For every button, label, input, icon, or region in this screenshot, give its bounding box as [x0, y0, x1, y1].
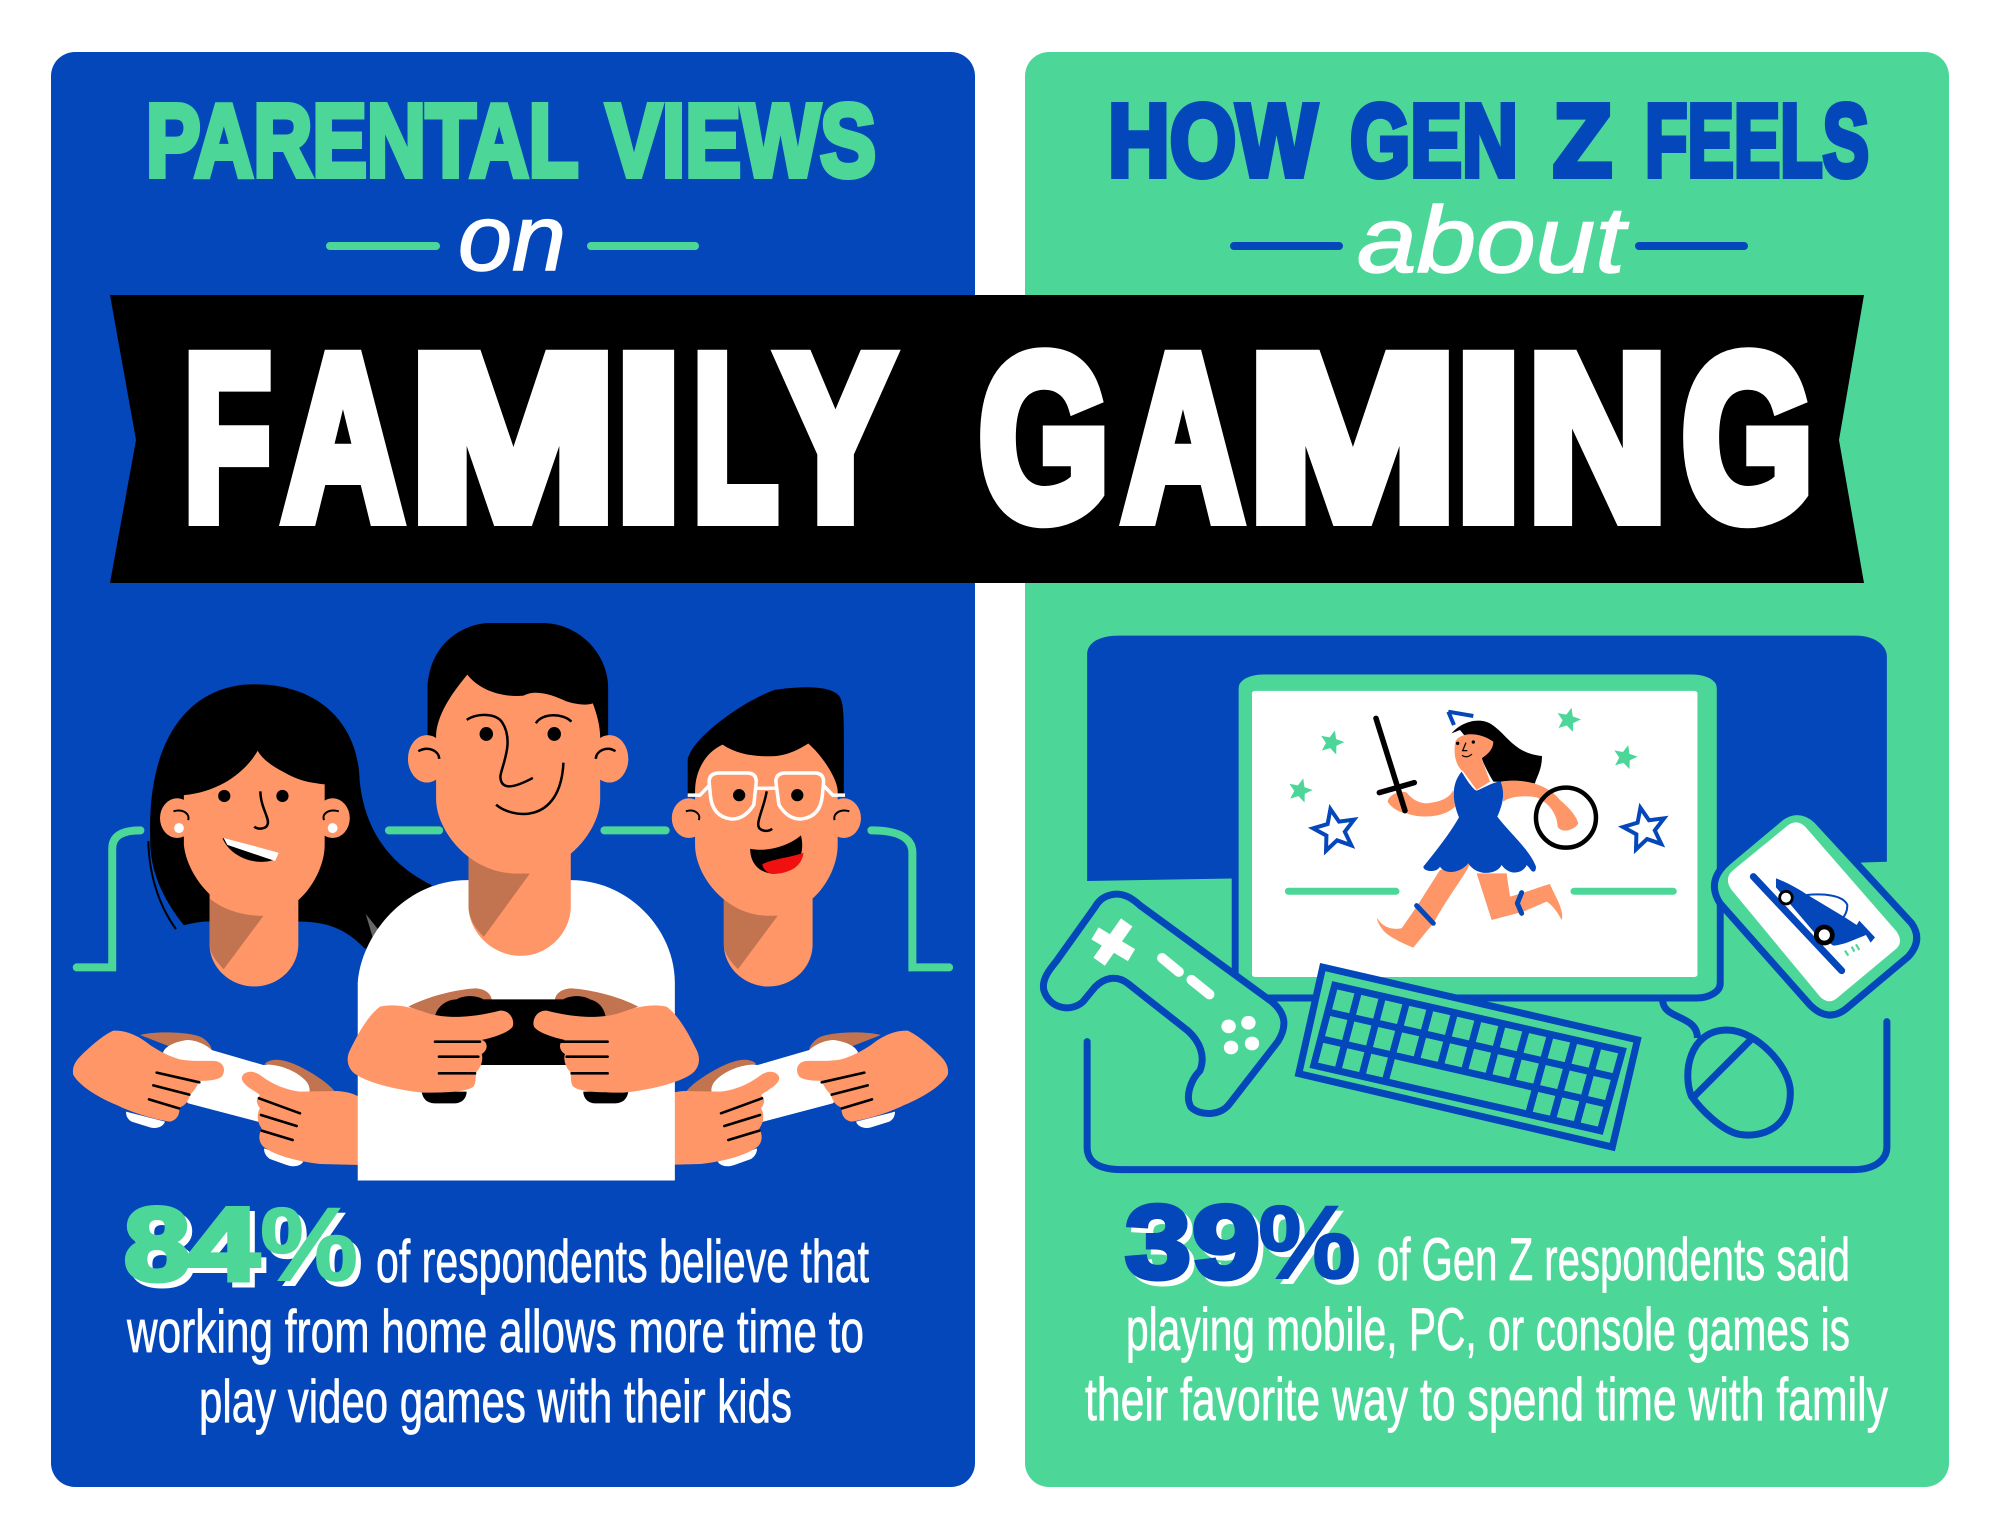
title banner: M: [1248, 308, 1457, 568]
stat: 84 percent: [124, 1187, 869, 1435]
ground lines: [1288, 888, 1673, 895]
woman: [148, 684, 432, 987]
mouse cable: [1663, 1000, 1697, 1038]
body text left: play video games with their kids: [199, 1368, 792, 1435]
big number 84%: %: [260, 1187, 358, 1303]
stat: 39 percent: [1085, 1185, 1888, 1433]
heading: how gen z feels about: about: [1357, 187, 1629, 292]
illustration: gaming desk setup: [1043, 636, 1887, 1170]
illustration: game character on monitor: [1286, 705, 1673, 948]
heading: how gen z feels about: [1108, 83, 1869, 292]
heading: how gen z feels about: Z: [1553, 83, 1612, 198]
heading: parental views on: PARENTAL: [146, 83, 577, 198]
big number 84%: %: [265, 1192, 363, 1308]
heading: parental views on: VIEWS: [606, 83, 876, 198]
panel: parental views: [51, 52, 975, 1487]
big number 39%: 9: [1192, 1185, 1260, 1301]
big number 84%: 8: [129, 1192, 195, 1308]
big number 84%: 8: [124, 1187, 190, 1303]
title banner: F: [184, 308, 271, 568]
big number 39%: %: [1258, 1185, 1356, 1301]
stars: [1286, 705, 1669, 852]
title banner: A: [283, 308, 403, 568]
title banner: [110, 295, 1864, 583]
big number 39%: 3: [1130, 1190, 1196, 1306]
big number 84%: [124, 1187, 363, 1308]
title banner: I: [1455, 308, 1522, 568]
heading: parental views on: on: [458, 185, 566, 290]
game controller: [1043, 894, 1284, 1114]
monitor: [1235, 675, 1720, 998]
title banner: N: [1528, 308, 1667, 568]
body text left: [126, 1228, 869, 1435]
title banner: A: [1123, 308, 1243, 568]
title banner: G: [979, 308, 1109, 568]
heading: how gen z feels about: HOW: [1108, 83, 1318, 198]
body text left: of respondents believe that: [376, 1228, 869, 1295]
center controller and hands: [348, 988, 699, 1103]
big number 39%: 3: [1125, 1185, 1191, 1301]
big number 39%: 9: [1197, 1190, 1265, 1306]
big number 84%: 4: [189, 1187, 259, 1303]
boy with glasses: [672, 687, 861, 987]
mouse: [1688, 1030, 1790, 1135]
big number 84%: 4: [194, 1192, 264, 1308]
panel: gen z: [1025, 52, 1949, 1487]
big number 39%: %: [1263, 1190, 1361, 1306]
blue wall: [1087, 636, 1887, 881]
desk outline: [1087, 1022, 1887, 1170]
tablet with car game: [1714, 812, 1917, 1015]
title banner: M: [410, 308, 616, 568]
green connector lines: [77, 830, 949, 967]
illustration: family with controllers: [73, 623, 949, 1181]
heading: how gen z feels about: FEELS: [1645, 83, 1869, 198]
body text right: [1085, 1226, 1888, 1433]
warrior girl: [1376, 712, 1596, 948]
body text left: working from home allows more time to: [126, 1298, 864, 1365]
title banner: Y: [778, 308, 893, 568]
title banner: G: [1682, 308, 1813, 568]
right player hands: [661, 1031, 948, 1166]
title banner: I: [615, 308, 682, 568]
man: [358, 623, 675, 1181]
heading: parental views on: [146, 83, 876, 290]
heading: how gen z feels about: GEN: [1350, 83, 1518, 198]
title banner: L: [693, 308, 778, 568]
keyboard: [1299, 967, 1637, 1147]
left player hands: [73, 1031, 360, 1166]
big number 39%: [1125, 1185, 1361, 1306]
